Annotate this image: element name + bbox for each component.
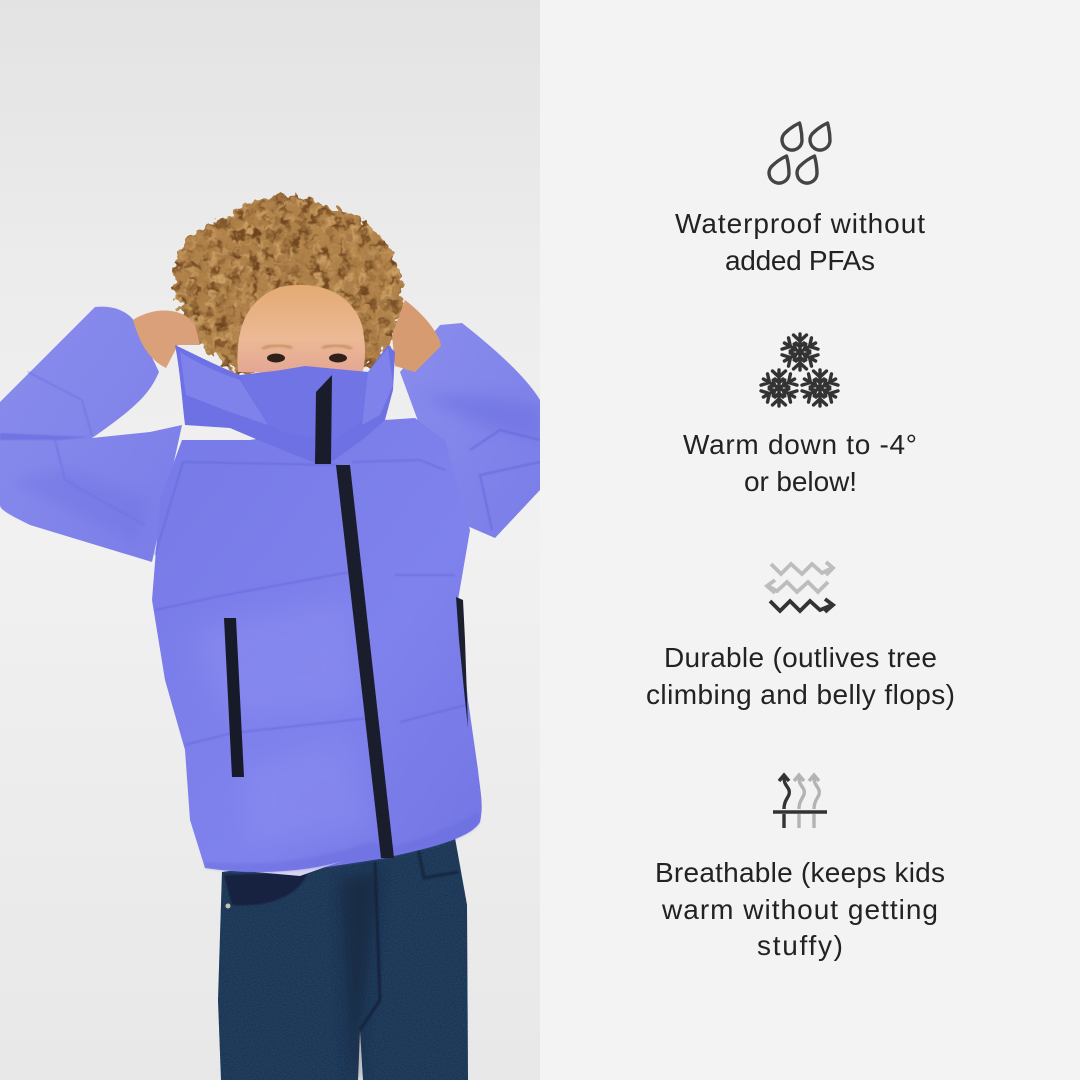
icon: snowflakes [760,334,839,406]
label: warm: Warm down to -4° [683,429,917,460]
left pocket zipper [224,618,244,777]
icon: zigzag arrows [767,562,833,612]
main zipper [336,465,394,858]
collar zipper [315,375,332,464]
label: waterproof [675,208,925,276]
quilting seams [155,460,466,745]
label: warm [683,429,917,497]
label: durable [646,642,955,710]
icon: breathable layers [773,775,827,828]
label: durable: Durable (outlives tree [664,642,937,673]
panel: photo of child in purple puffer jacket [0,0,540,1080]
feature: durable [646,562,955,710]
label: waterproof: Waterproof without [675,208,925,239]
label: breathable: warm without getting [661,894,938,925]
label: waterproof: added PFAs [725,245,875,276]
feature: warm [683,334,917,497]
icon: water drops [769,123,830,183]
jacket body [152,418,482,876]
collar [175,345,395,463]
right pocket zipper [456,597,468,728]
panel background [540,0,1080,1080]
panel: feature list [646,121,955,961]
right hand [392,300,441,372]
label: durable: climbing and belly flops) [646,679,955,710]
jacket left sleeve [0,307,182,562]
lining peek [255,860,345,876]
feature: waterproof [675,123,925,276]
feature: breathable [655,775,945,961]
photo backdrop [0,0,540,1080]
label: warm: or below! [744,466,857,497]
label: breathable: Breathable (keeps kids [655,857,945,888]
face [237,285,365,375]
jacket right sleeve [400,323,540,538]
label: breathable [655,857,945,961]
left hand [133,310,200,368]
label: breathable: stuffy) [757,930,843,961]
hair [173,196,403,375]
jeans [218,838,468,1080]
